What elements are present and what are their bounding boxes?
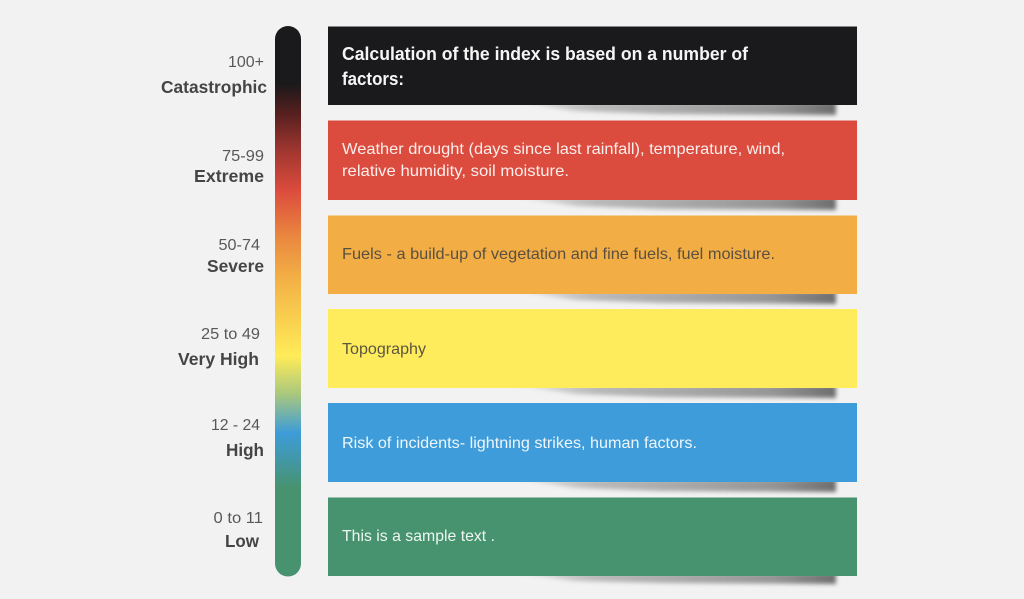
panel: weather	[328, 120, 857, 200]
label: 75-99 Extreme	[194, 148, 264, 186]
panel shadows	[515, 102, 836, 584]
label: 100+ Catastrophic	[161, 54, 267, 97]
panel: topography	[328, 309, 857, 388]
label: 50-74 Severe	[207, 237, 264, 276]
panel: weather: Weather drought (days since last rainfall), temperature, wind,	[342, 141, 785, 158]
label: 12 - 24 High: 12 - 24	[211, 417, 260, 434]
label: 75-99 Extreme: Extreme	[194, 166, 264, 186]
panel: sample text: This is a sample text .	[342, 528, 495, 545]
panel: weather: relative humidity, soil moisture.	[342, 163, 569, 180]
scale labels	[161, 54, 267, 551]
label: 12 - 24 High: High	[226, 440, 264, 460]
label: 25 to 49 Very High: Very High	[178, 349, 259, 369]
label: 100+ Catastrophic: 100+	[228, 54, 264, 71]
label: 100+ Catastrophic: Catastrophic	[161, 77, 267, 97]
label: 12 - 24 High	[211, 417, 264, 460]
label: 0 to 11 Low	[214, 510, 263, 551]
label: 75-99 Extreme: 75-99	[222, 148, 264, 165]
label: 0 to 11 Low: Low	[225, 531, 259, 551]
gradient scale bar	[275, 26, 301, 576]
panel: calculation heading	[328, 26, 857, 105]
panel: calculation heading: Calculation of the index is based on a number of	[342, 44, 749, 64]
panel: risk of incidents	[328, 403, 857, 482]
label: 25 to 49 Very High: 25 to 49	[201, 326, 260, 343]
label: 0 to 11 Low: 0 to 11	[214, 510, 263, 527]
panel: fuels	[328, 216, 857, 294]
panel: topography: Topography	[342, 341, 426, 358]
label: 25 to 49 Very High	[178, 326, 260, 369]
panel: risk of incidents: Risk of incidents- lightning strikes, human factors.	[342, 435, 697, 452]
label: 50-74 Severe: Severe	[207, 256, 264, 276]
panel: sample text	[328, 498, 857, 576]
label: 50-74 Severe: 50-74	[218, 237, 260, 254]
panel: fuels: Fuels - a build-up of vegetation and fine fuels, fuel moisture.	[342, 246, 775, 263]
panel: calculation heading: factors:	[342, 69, 404, 89]
